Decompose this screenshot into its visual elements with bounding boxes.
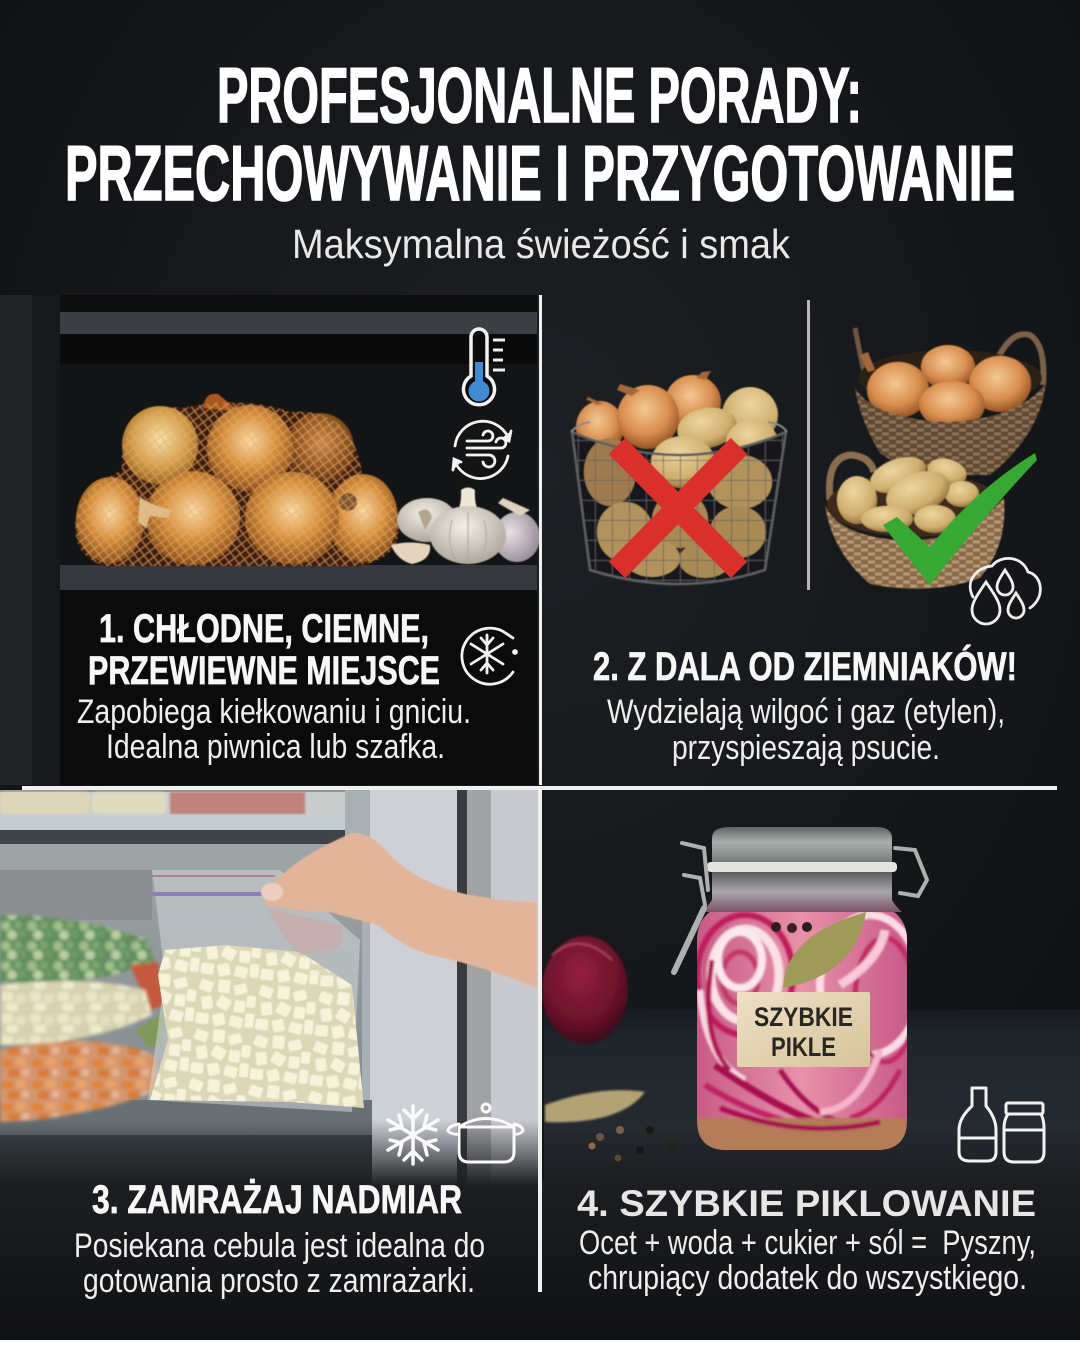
jar label: SZYBKIE — [754, 1002, 853, 1032]
icon: thermometer — [464, 329, 505, 405]
heading 1 — [88, 607, 440, 693]
red cross — [617, 446, 739, 570]
icon: oil bottle — [959, 1088, 996, 1161]
jar clasp — [674, 843, 927, 972]
basket with onions — [855, 328, 1046, 475]
hand holding bag — [261, 833, 537, 988]
text 4 — [579, 1224, 1036, 1297]
heading 1: PRZEWIEWNE MIEJSCE — [88, 649, 440, 693]
text 2: przyspieszają psucie. — [672, 729, 940, 767]
jar lid — [707, 827, 897, 872]
text 1: Zapobiega kiełkowaniu i gniciu. — [77, 693, 471, 731]
vertical separator — [807, 300, 810, 590]
text 1: Idealna piwnica lub szafka. — [106, 728, 445, 766]
bag of chopped onion — [148, 870, 368, 1115]
green check mark — [883, 453, 1037, 585]
basket with potatoes — [825, 450, 1004, 589]
panel dividers — [22, 295, 1057, 1292]
heading 3: 3. ZAMRAŻAJ NADMIAR — [92, 1178, 462, 1222]
pickle jar — [674, 827, 927, 1154]
jar label — [737, 992, 870, 1067]
text 1 — [77, 693, 471, 766]
bottom shelf fade — [0, 1120, 538, 1186]
panel: quick pickling — [542, 827, 1080, 1297]
frozen vegetable bags — [0, 915, 165, 1122]
panel: away from potatoes — [571, 300, 1046, 767]
icon: pot — [448, 1104, 523, 1162]
panel: cool dark place — [0, 295, 540, 785]
bay leaf in jar — [783, 912, 866, 988]
lower panels dark band — [0, 1180, 1080, 1340]
text 2: Wydzielają wilgoć i gaz (etylen), — [607, 693, 1005, 731]
icon: snowflake — [388, 1106, 438, 1164]
heading 4: 4. SZYBKIE PIKLOWANIE — [577, 1183, 1036, 1224]
red onion — [542, 936, 628, 1044]
table top — [544, 1010, 1080, 1180]
icon: moisture — [970, 558, 1040, 624]
jar neck — [702, 872, 902, 912]
garlic — [391, 488, 540, 564]
cabinet — [0, 295, 537, 785]
title — [65, 51, 1015, 217]
wire basket with potatoes and onions — [571, 371, 788, 584]
text 3: Posiekana cebula jest idealna do — [74, 1227, 485, 1265]
text 2 — [607, 693, 1005, 767]
panel: freeze — [0, 790, 538, 1300]
icon: air circulation — [453, 421, 511, 479]
subtitle: Maksymalna świeżość i smak — [292, 221, 790, 267]
heading 1: 1. CHŁODNE, CIEMNE, — [99, 607, 429, 651]
freezer interior — [0, 790, 538, 1185]
jar label: PIKLE — [771, 1032, 836, 1062]
icon: small jar — [1004, 1103, 1044, 1162]
bay leaf and peppercorns — [545, 1090, 676, 1162]
onions in a net — [70, 394, 405, 570]
icon: cold circle — [462, 628, 516, 684]
text 3: gotowania prosto z zamrażarki. — [83, 1262, 475, 1300]
text 3 — [74, 1227, 485, 1300]
